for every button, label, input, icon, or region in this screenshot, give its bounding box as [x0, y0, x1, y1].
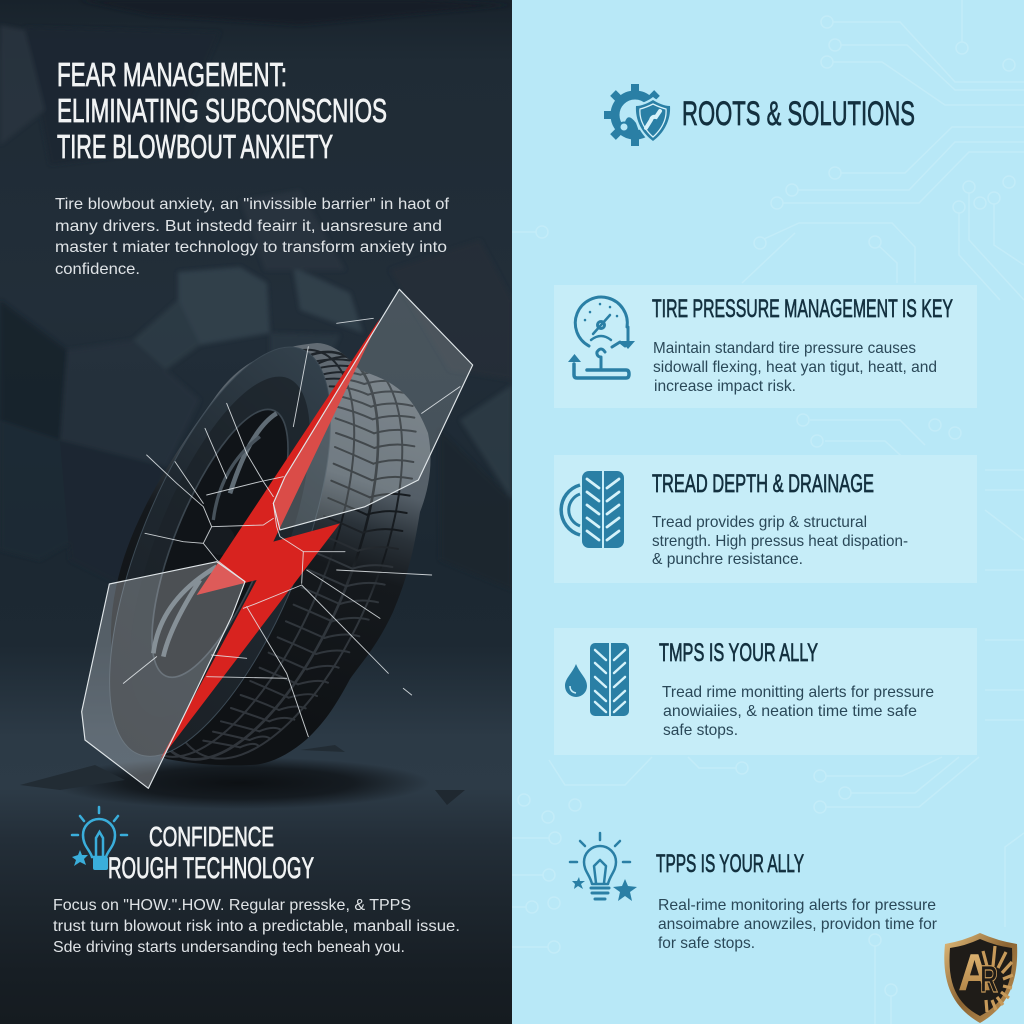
section: TPPS is your ally: [570, 833, 938, 952]
icon: water drop and tread: [565, 643, 629, 716]
section text: Real-rime monitoring alerts for pressure: [658, 897, 936, 914]
card text: [662, 684, 934, 739]
section text: ansoimabre anowziles, providon time for: [658, 916, 938, 933]
icon: lightbulb with stars: [570, 833, 637, 901]
card text: Tread rime monitting alerts for pressure: [662, 684, 934, 701]
card text: [653, 340, 937, 395]
intro text: [55, 196, 450, 278]
card text: increase impact risk.: [654, 378, 796, 395]
title: FEAR MANAGEMENT:: [57, 56, 287, 93]
card: tire pressure management: [554, 285, 977, 408]
card text: safe stops.: [663, 722, 738, 739]
icon: gear with shield: [604, 84, 672, 146]
card: tread depth and drainage: [554, 455, 977, 583]
tire tread body: [111, 343, 430, 766]
confidence text: trust turn blowout risk into a predictable, manball issue.: [53, 918, 460, 935]
card text: Maintain standard tire pressure causes: [653, 340, 916, 357]
icon: pressure gauge: [568, 297, 635, 378]
logo: gold shield with AR monogram: [944, 933, 1017, 1023]
card text: [652, 514, 908, 568]
intro text: master t miater technology to transform anxiety into: [55, 239, 447, 256]
section text: for safe stops.: [658, 935, 755, 952]
lightning bolt: [160, 318, 380, 760]
card text: Tread provides grip & structural: [652, 514, 867, 531]
icon: lightbulb with star (left): [72, 807, 127, 870]
heading: confidence through technology: ROUGH TECHNOLOGY: [108, 852, 314, 885]
title: [57, 56, 387, 165]
illustration: shattered tire with lightning bolt: [64, 289, 473, 791]
logo: gold shield with AR monogram: A: [958, 944, 991, 1002]
glass pane lower: [82, 562, 245, 788]
tire sidewall and wheel: [64, 319, 376, 784]
card text: strength. High pressus heat dispation-: [652, 533, 908, 550]
panel: right light background: [512, 0, 1024, 1024]
panel: left dark background: [0, 0, 512, 1024]
confidence text: [53, 897, 460, 956]
section text: [658, 897, 938, 952]
title: ELIMINATING SUBCONSCNIOS: [57, 92, 387, 129]
intro text: many drivers. But instedd feairr it, uansresure and: [55, 218, 442, 235]
heading: confidence through technology: CONFIDENCE: [149, 821, 274, 852]
intro text: confidence.: [55, 261, 140, 278]
heading: confidence through technology: [108, 821, 314, 885]
card: TMPS is your ally: [554, 628, 977, 755]
logo: gold shield with AR monogram: R: [980, 959, 998, 1001]
confidence text: Sde driving starts undersanding tech beneah you.: [53, 939, 405, 956]
glass pane upper: [273, 289, 473, 530]
card text: sidowall flexing, heat yan tigut, heatt, and: [653, 359, 937, 376]
card heading: TMPS IS YOUR ALLY: [659, 639, 818, 667]
icon: tire tread: [561, 471, 624, 548]
glass crack lines: [123, 318, 460, 737]
card heading: TREAD DEPTH & DRAINAGE: [652, 470, 874, 498]
floor shadow: [50, 757, 430, 809]
card text: & punchre resistance.: [652, 551, 803, 568]
section heading: TPPS IS YOUR ALLY: [656, 850, 804, 878]
intro text: Tire blowbout anxiety, an "invissible barrier" in haot of: [55, 196, 450, 213]
confidence text: Focus on "HOW.".HOW. Regular presske, & TPPS: [53, 897, 411, 914]
title: TIRE BLOWBOUT ANXIETY: [57, 128, 333, 165]
card text: anowiaiies, & neation time time safe: [663, 703, 917, 720]
